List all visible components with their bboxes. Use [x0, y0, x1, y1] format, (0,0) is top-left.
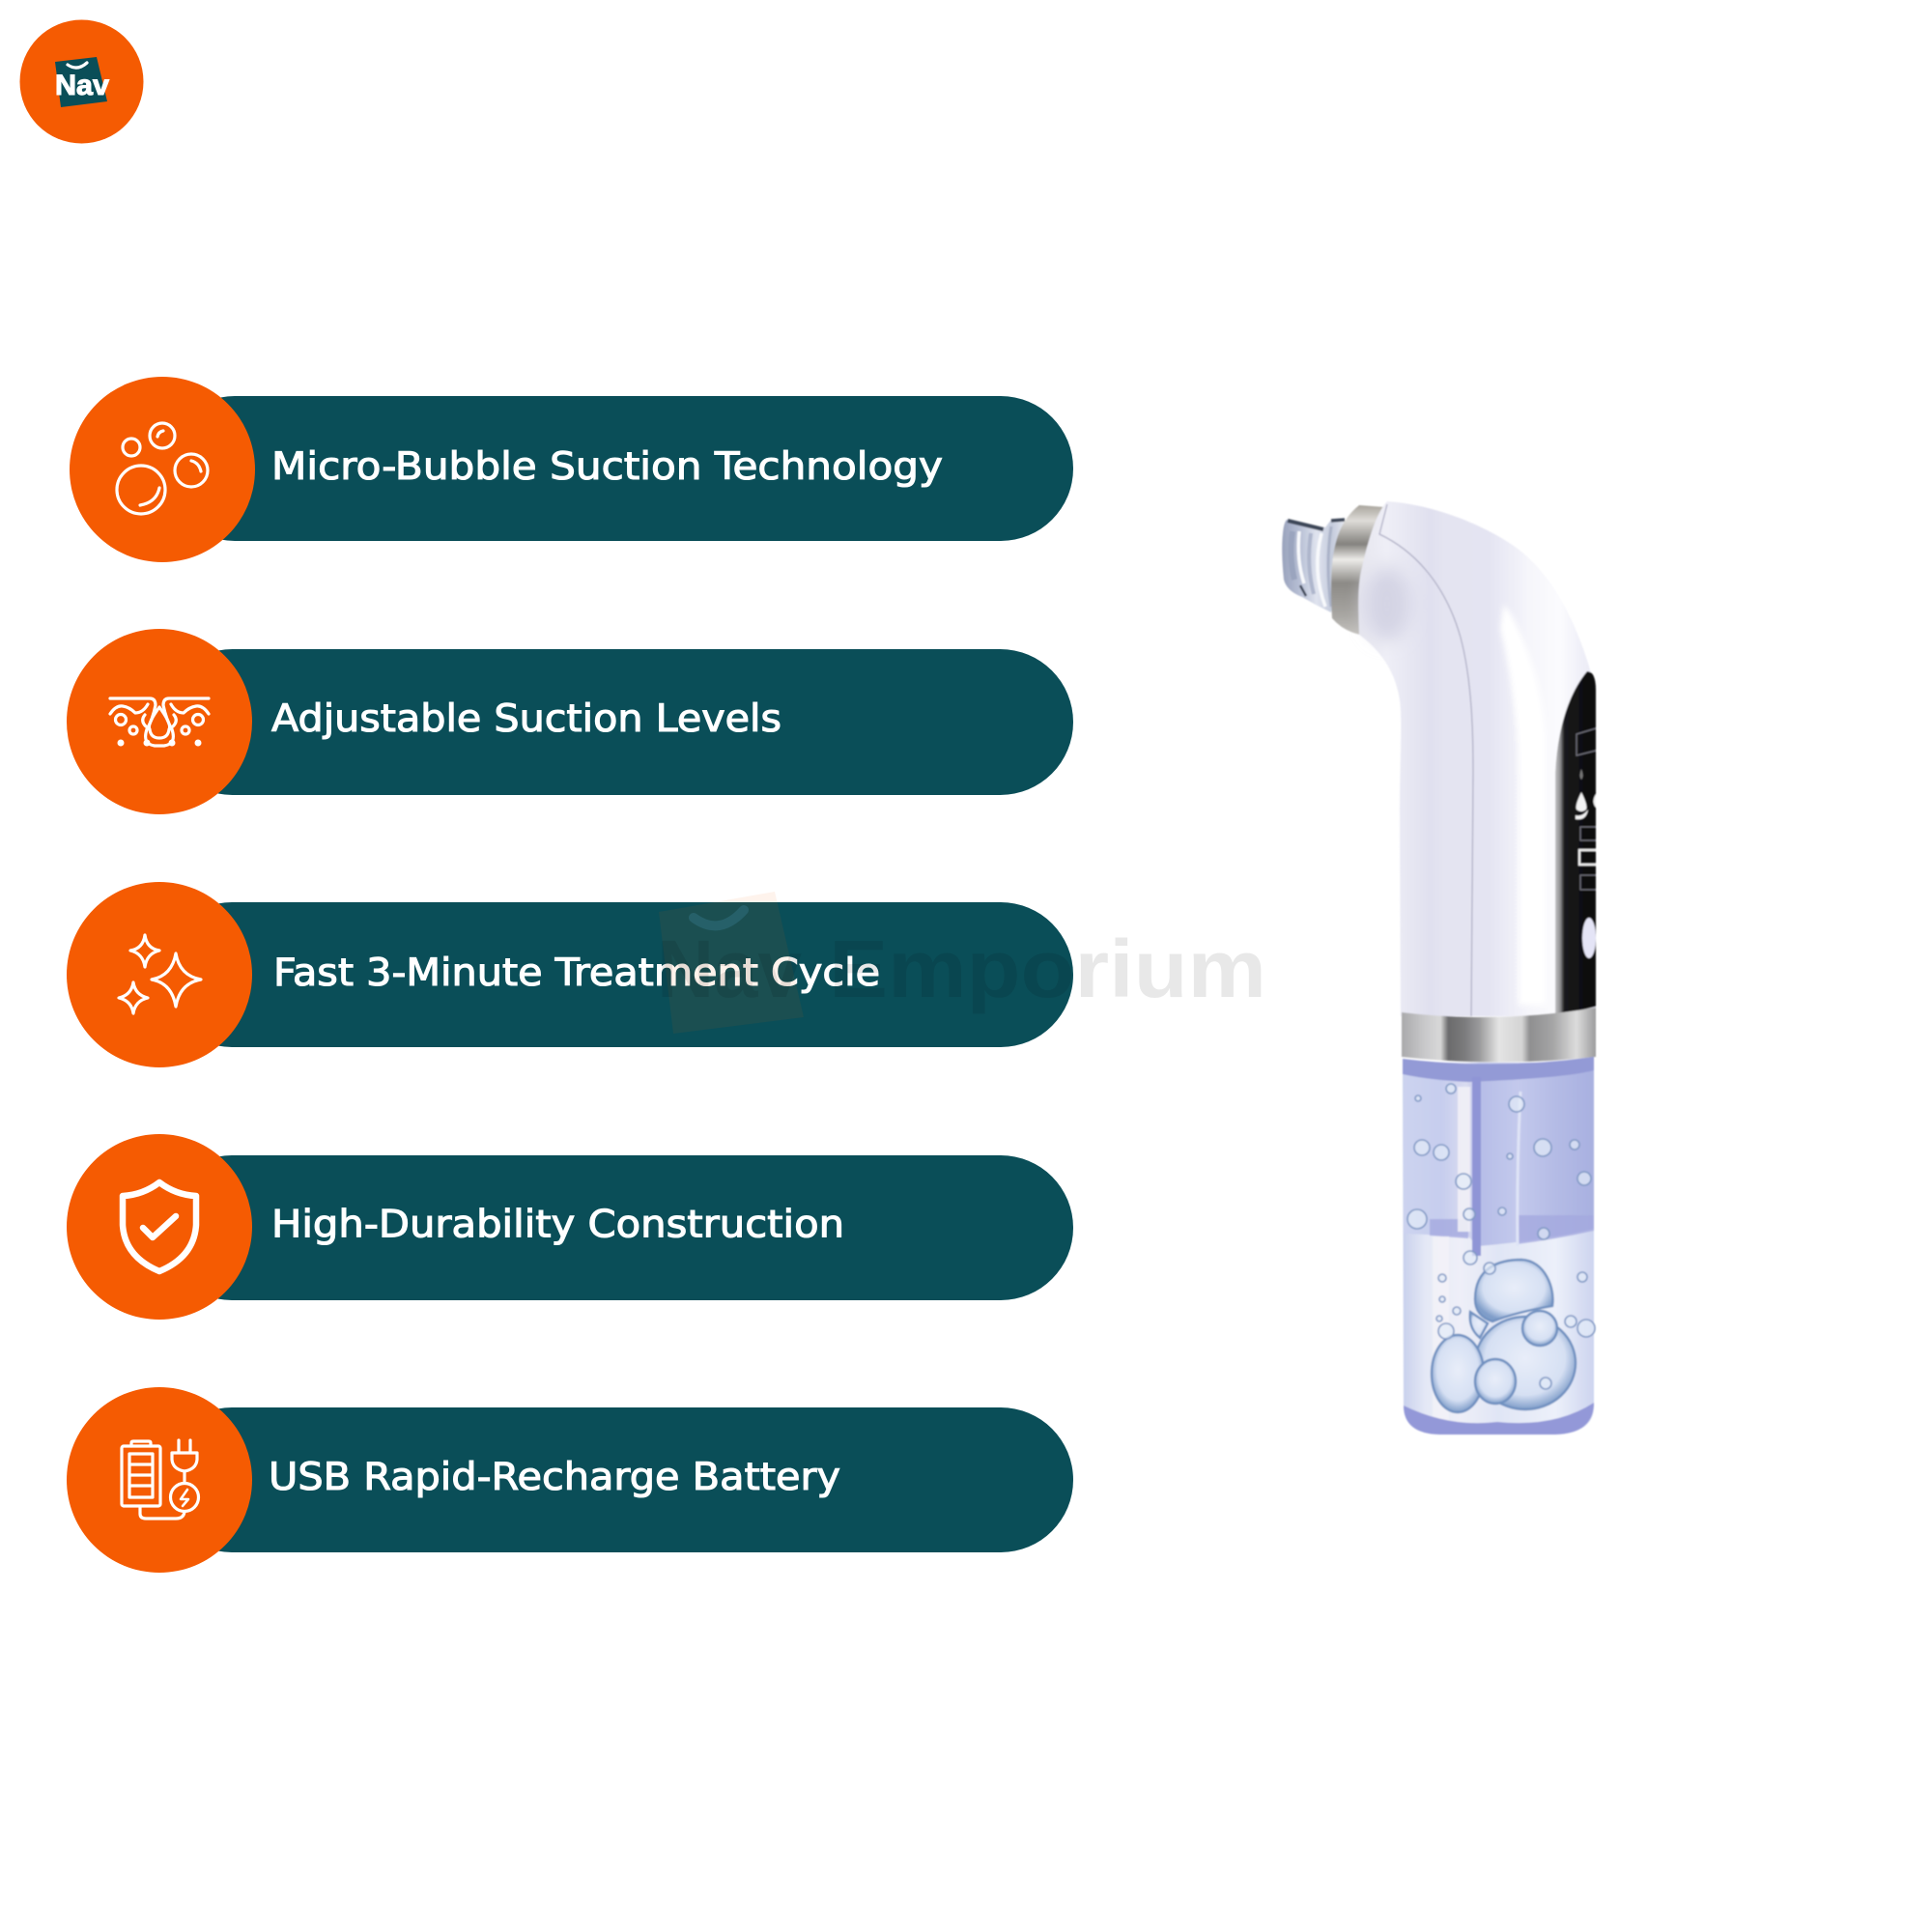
- watermark wordmark Nav: Nav: [657, 923, 802, 1014]
- logo smile: [68, 63, 87, 68]
- water droplets: [1407, 1084, 1595, 1389]
- icon: sparkles: [119, 935, 201, 1013]
- circle badge: [67, 629, 252, 814]
- tank rim: [1403, 1057, 1594, 1082]
- suction tube: [1472, 1077, 1481, 1256]
- icon: battery and plug: [122, 1440, 199, 1519]
- pill: [159, 1407, 1073, 1552]
- watermark: [657, 892, 1266, 1034]
- circle badge: [67, 882, 252, 1067]
- pill: [159, 649, 1073, 795]
- feature row: adjustable suction: [67, 629, 1073, 814]
- watermark smile: [694, 910, 744, 925]
- label: Adjustable Suction Levels: [271, 696, 781, 741]
- pill: [159, 1155, 1073, 1300]
- tank upper water: [1404, 1063, 1594, 1246]
- icon: bubbles: [117, 423, 208, 514]
- water tank: [1403, 1057, 1595, 1435]
- logo bag: [55, 57, 107, 107]
- circle badge: [67, 1134, 252, 1320]
- tank lower section: [1403, 1063, 1594, 1434]
- logo wordmark: Nav: [55, 70, 109, 101]
- panel button: [1582, 918, 1596, 958]
- feature row: micro-bubble suction: [70, 377, 1073, 562]
- watermark bag: [659, 892, 804, 1034]
- clear nozzle tip: [1282, 519, 1345, 612]
- label: Micro-Bubble Suction Technology: [271, 444, 943, 489]
- body seam line: [1379, 504, 1473, 1016]
- circle badge: [67, 1387, 252, 1573]
- feature row: USB battery: [67, 1387, 1073, 1573]
- large bubbles: [1432, 1260, 1576, 1412]
- circle badge: [70, 377, 255, 562]
- panel markings: [1577, 728, 1596, 890]
- neck shading: [1364, 567, 1410, 640]
- label: USB Rapid-Recharge Battery: [269, 1455, 840, 1499]
- logo badge: [19, 19, 143, 143]
- chrome band: [1402, 1008, 1596, 1063]
- label: High-Durability Construction: [271, 1202, 844, 1246]
- icon: shield with check: [123, 1182, 196, 1271]
- chrome collar: [1331, 505, 1385, 635]
- darker water band: [1430, 1215, 1594, 1244]
- feature row: high durability: [67, 1134, 1073, 1320]
- pill: [159, 902, 1073, 1047]
- black control panel: [1555, 671, 1596, 1016]
- panel drop icons: [1576, 769, 1596, 819]
- water streak: [1518, 1092, 1520, 1246]
- pill: [162, 396, 1073, 541]
- icon: skin pore: [110, 698, 209, 746]
- watermark wordmark Emporium: Emporium: [829, 923, 1266, 1014]
- product image: blackhead remover device: [1282, 501, 1596, 1435]
- tube highlight: [1458, 1087, 1470, 1232]
- label: Fast 3-Minute Treatment Cycle: [273, 951, 880, 995]
- gloss highlight: [1500, 604, 1546, 1005]
- white body: [1358, 501, 1596, 1016]
- feature row: fast treatment cycle: [67, 882, 1073, 1067]
- tank base: [1404, 1403, 1594, 1435]
